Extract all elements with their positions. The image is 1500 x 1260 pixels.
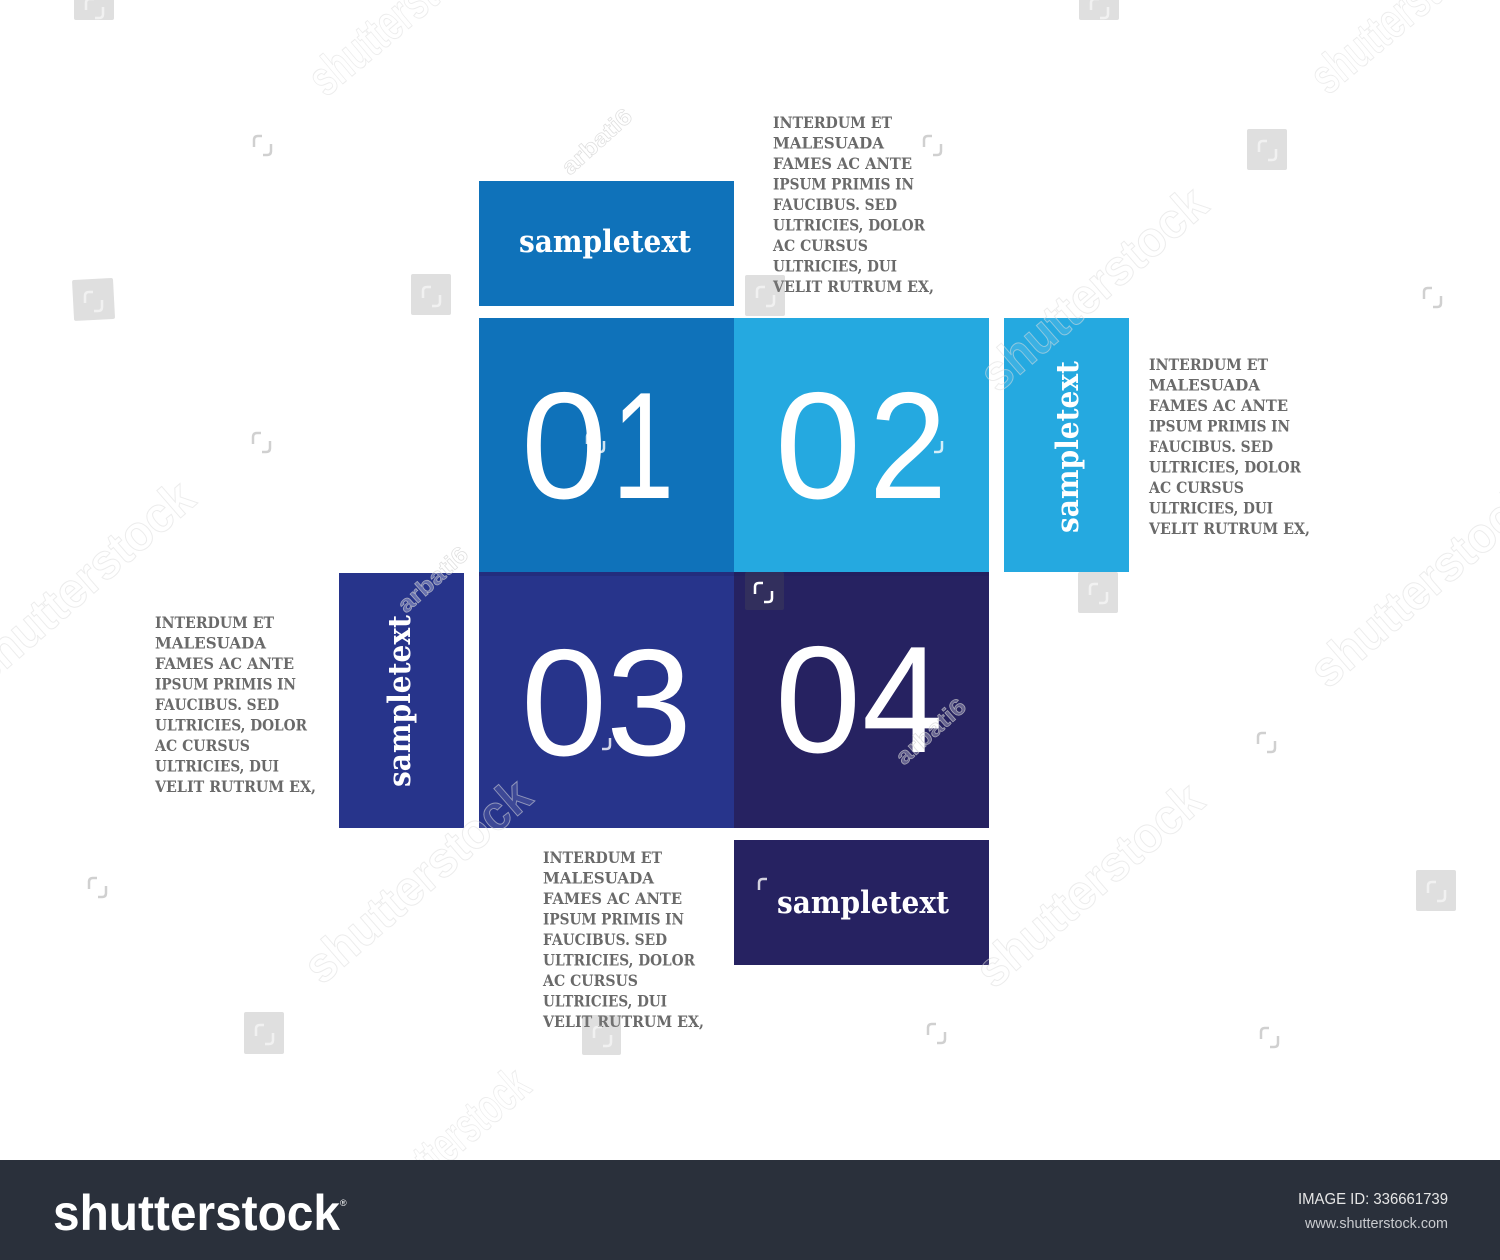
watermark: grey squares: [72, 0, 1456, 1055]
number 03: 0: [521, 618, 607, 788]
text block 03: MALESUADA: [155, 634, 267, 652]
footer logo: shutterstock: ®: [340, 1198, 347, 1208]
panel: square 04: [734, 572, 989, 828]
footer logo: shutterstock: shutterstock: [53, 1185, 340, 1241]
watermark: arbat16 credits: arbati6: [890, 693, 971, 770]
text block 03: FAUCIBUS. SED: [155, 695, 279, 714]
text block 01: IPSUM PRIMIS IN: [773, 174, 914, 194]
text block 04: MALESUADA: [543, 868, 655, 888]
number 04: 4: [862, 615, 943, 785]
number 02: 2: [869, 361, 947, 531]
number 04: 0: [775, 615, 861, 785]
number 04: [775, 615, 943, 785]
text block 02: ULTRICIES, DOLOR: [1149, 458, 1301, 476]
footer bar: [0, 1160, 1500, 1260]
text block 01: ULTRICIES, DUI: [773, 256, 897, 276]
text block 04: VELIT RUTRUM EX,: [542, 1012, 704, 1031]
text block 04: FAUCIBUS. SED: [543, 930, 667, 949]
text block 02: [1148, 355, 1310, 538]
text block 02: INTERDUM ET: [1149, 355, 1268, 374]
watermark: arbat16 credits: arbati6: [392, 541, 473, 618]
text block 03: AC CURSUS: [154, 736, 250, 755]
text block 02: VELIT RUTRUM EX,: [1148, 519, 1310, 538]
text block 04: [542, 848, 704, 1031]
text block 01: ULTRICIES, DOLOR: [773, 216, 925, 234]
text block 03: FAMES AC ANTE: [155, 654, 294, 673]
footer url: www.shutterstock.com: [1304, 1215, 1448, 1232]
text block 03: ULTRICIES, DOLOR: [155, 716, 307, 734]
text block 04: ULTRICIES, DUI: [543, 992, 667, 1010]
text block 02: FAMES AC ANTE: [1149, 396, 1288, 415]
text block 02: ULTRICIES, DUI: [1149, 498, 1273, 518]
text block 01: [772, 113, 934, 296]
text block 04: ULTRICIES, DOLOR: [543, 950, 695, 970]
tab label 02: sampletext: [1050, 360, 1086, 533]
text block 04: IPSUM PRIMIS IN: [543, 910, 684, 928]
text block 01: VELIT RUTRUM EX,: [772, 277, 934, 296]
number 02: 0: [775, 361, 861, 531]
text block 01: FAUCIBUS. SED: [773, 195, 897, 214]
watermark: arbat16 credits: [392, 103, 971, 770]
text block 02: MALESUADA: [1149, 376, 1261, 394]
tab label 04: sampletext: [777, 885, 950, 921]
watermark: arbat16 credits: arbati6: [556, 103, 637, 180]
panel: square 02: [734, 318, 989, 572]
text block 02: AC CURSUS: [1148, 478, 1244, 497]
watermark: shutterstock diagonal text: shutterstock: [964, 771, 1214, 998]
number 03: [521, 618, 692, 788]
number 01: 1: [612, 361, 674, 531]
footer image id: IMAGE ID: 336661739: [1298, 1191, 1448, 1208]
number 03: 3: [606, 618, 692, 788]
text block 03: ULTRICIES, DUI: [155, 756, 279, 776]
panel: tab 01: [479, 181, 734, 306]
text block 03: VELIT RUTRUM EX,: [154, 777, 316, 796]
number 01: 0: [521, 361, 607, 531]
panel: square 01: [479, 318, 734, 572]
panel: tab 03: [339, 573, 464, 828]
tab label 01: sampletext: [519, 224, 692, 260]
text block 02: FAUCIBUS. SED: [1149, 437, 1273, 456]
watermark: shutterstock diagonal text: shutterstock: [968, 175, 1218, 402]
watermark: shutterstock diagonal text: tterstock: [402, 1056, 540, 1186]
text block 04: INTERDUM ET: [543, 848, 662, 867]
text block 01: MALESUADA: [773, 134, 885, 152]
watermark: shutterstock diagonal text: shutterstock: [292, 767, 542, 994]
number 01: [521, 361, 674, 531]
text block 03: [154, 613, 316, 796]
text block 03: IPSUM PRIMIS IN: [155, 674, 296, 694]
number 02: [775, 361, 947, 531]
watermark: icons inside squares: [85, 0, 1445, 1046]
watermark: small corner icons: [89, 136, 1441, 1047]
text block 01: AC CURSUS: [772, 236, 868, 255]
panel: tab 04: [734, 840, 989, 965]
text block 04: FAMES AC ANTE: [543, 889, 682, 908]
tab label 03: sampletext: [382, 614, 418, 787]
text block 03: INTERDUM ET: [155, 613, 274, 632]
text block 04: AC CURSUS: [542, 971, 638, 990]
panel: square 03: [479, 572, 734, 828]
text block 01: INTERDUM ET: [773, 113, 892, 132]
panel: tab 02: [1004, 318, 1129, 572]
text block 01: FAMES AC ANTE: [773, 154, 912, 173]
text block 02: IPSUM PRIMIS IN: [1149, 416, 1290, 436]
